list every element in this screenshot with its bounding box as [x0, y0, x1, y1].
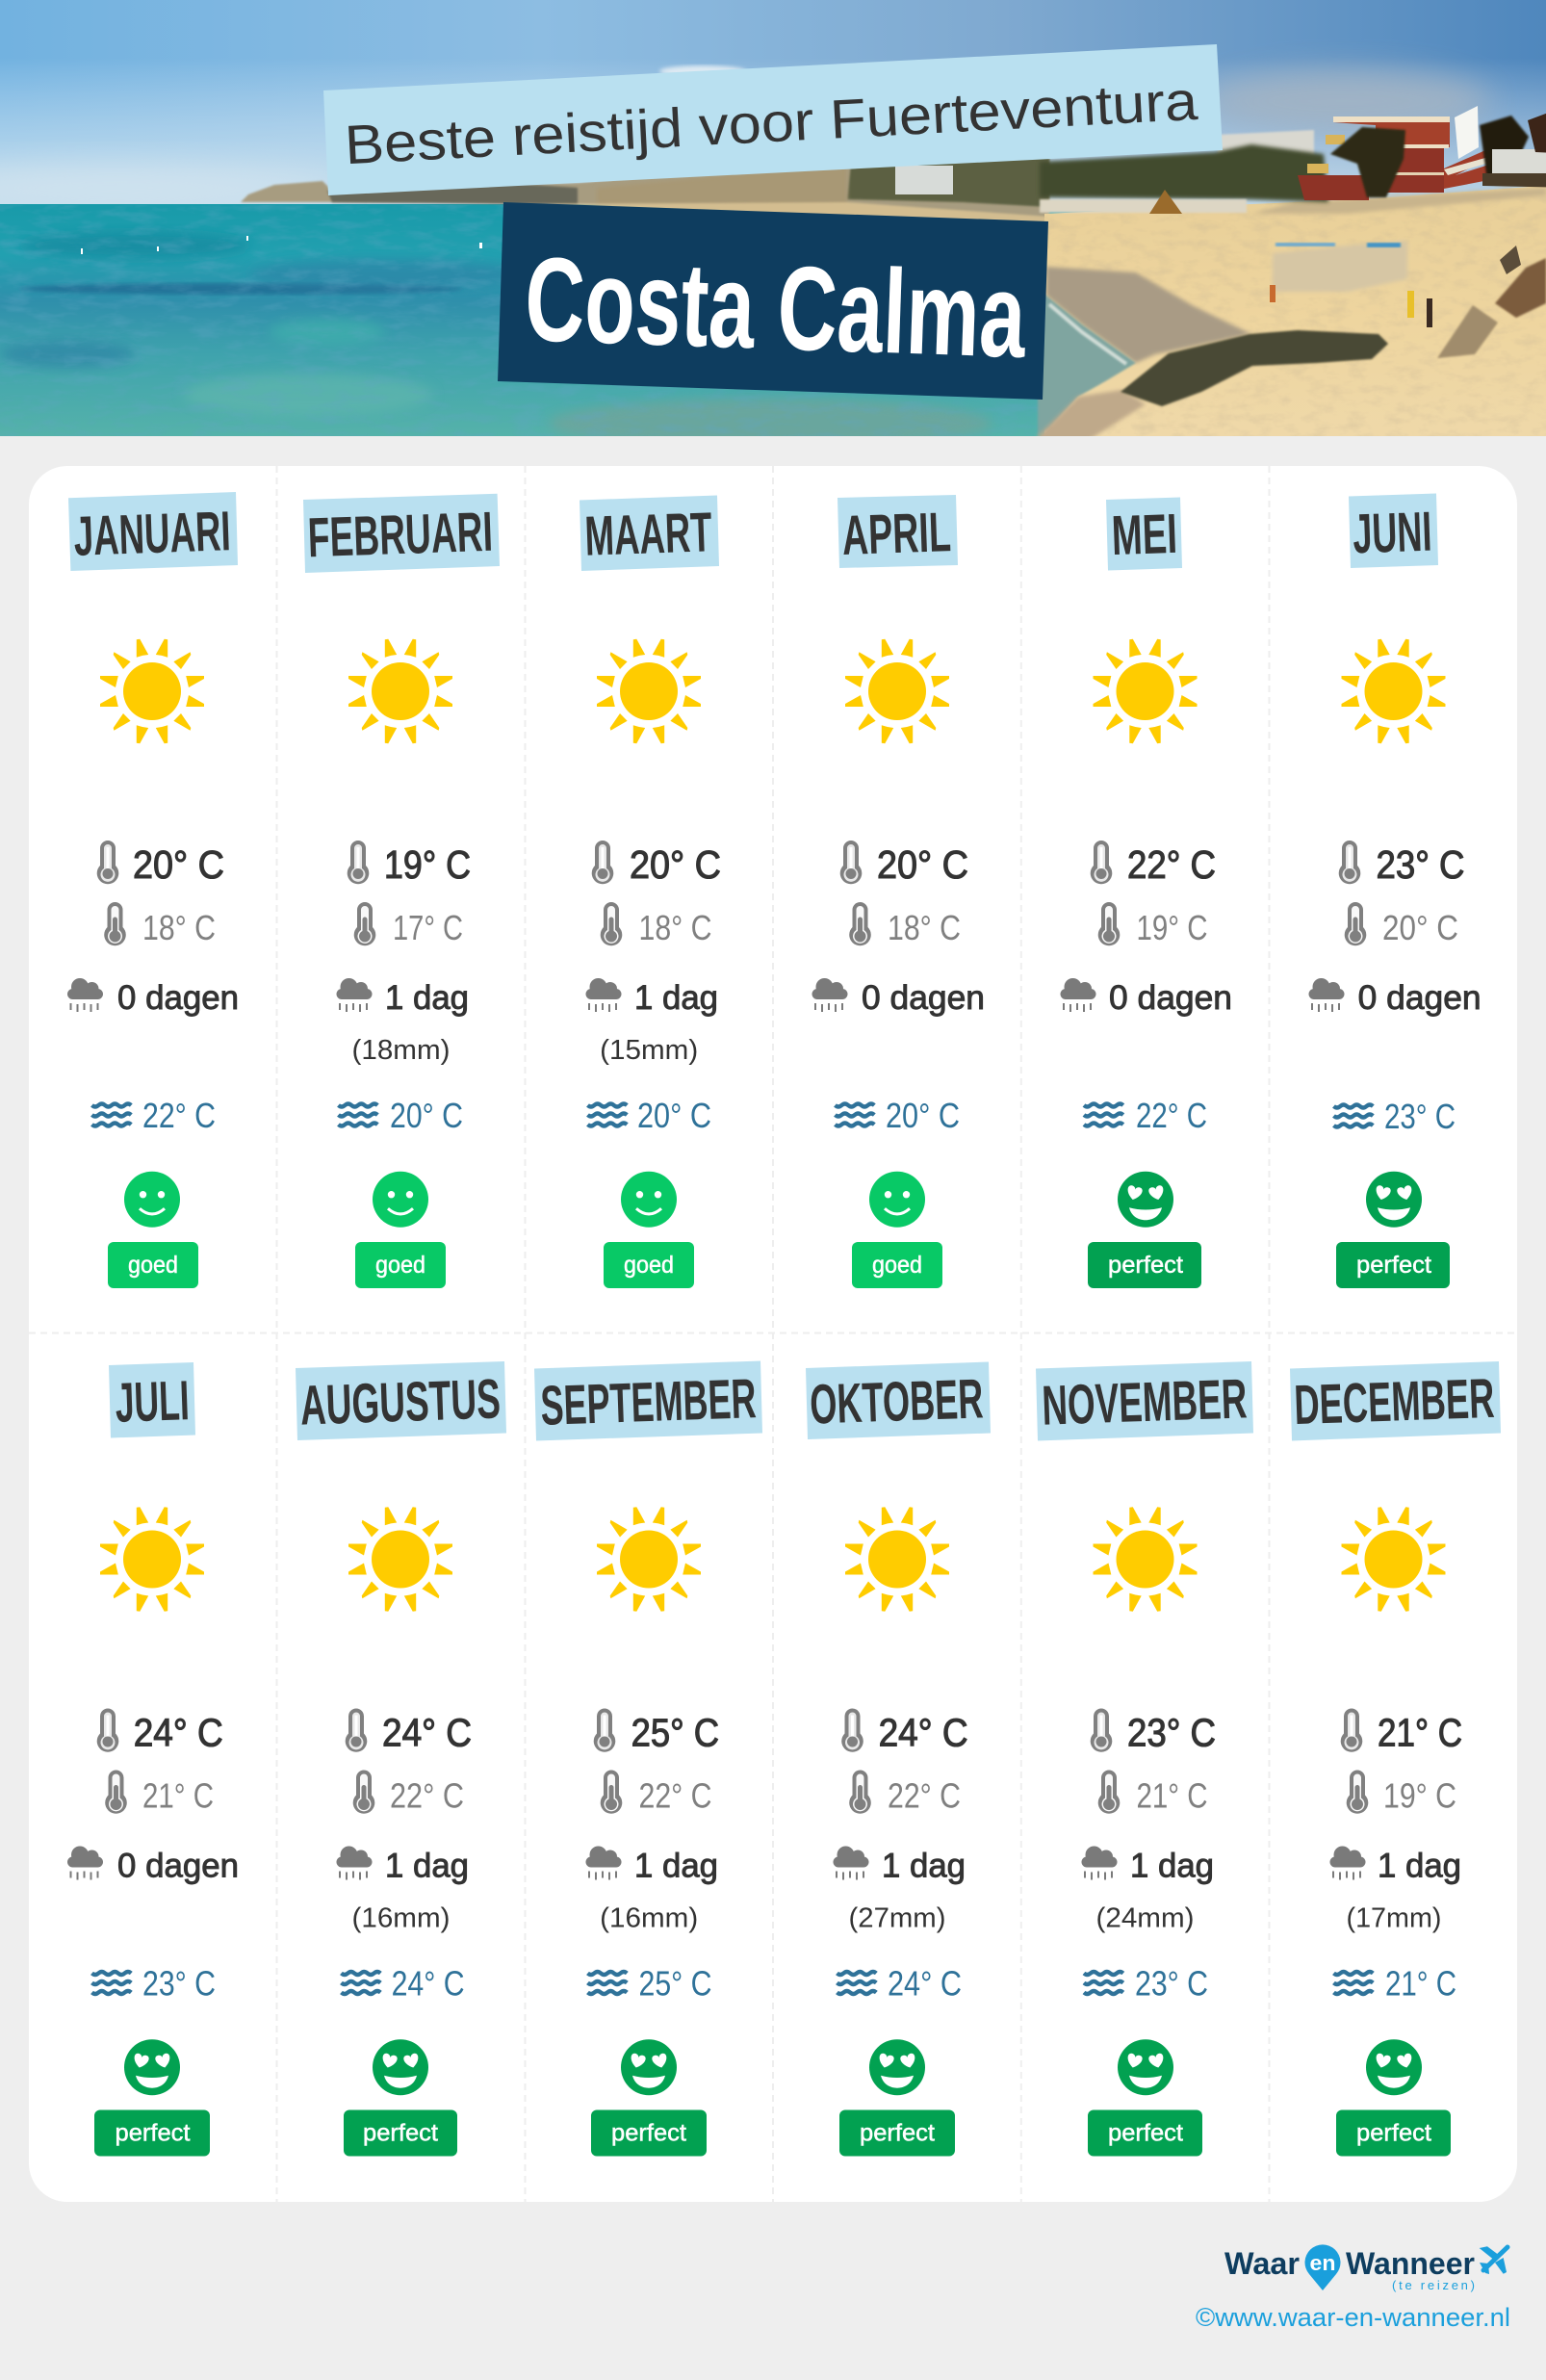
logo: Waar en Wanneer: [1224, 2244, 1507, 2292]
min temperature: [849, 1770, 961, 1816]
rain: [1309, 978, 1482, 1017]
min temperature: [104, 902, 216, 947]
min temperature: 18° C: [639, 908, 712, 947]
icon: sun: [845, 1507, 949, 1612]
month label: JULI: [115, 1369, 191, 1435]
rain: (16mm): [352, 1902, 451, 1933]
max temperature: [97, 1708, 223, 1754]
max temperature: [1091, 1708, 1216, 1754]
month label: SEPTEMBER: [539, 1367, 758, 1437]
month label: [1349, 493, 1438, 568]
min temperature: 18° C: [142, 908, 216, 947]
rating: perfect: [839, 2039, 955, 2157]
min temperature: 20° C: [1382, 908, 1458, 947]
icon: map pin: [1305, 2244, 1340, 2290]
title banner: Costa Calma: [523, 233, 1028, 383]
rain: 0 dagen: [1109, 979, 1232, 1017]
rating: goed: goed: [872, 1252, 922, 1279]
rating: perfect: [1336, 1172, 1450, 1288]
icon: sun: [1094, 639, 1198, 743]
rain: 1 dag: [634, 979, 718, 1017]
rain: [67, 1847, 239, 1885]
rating: goed: [604, 1172, 694, 1288]
rain: 1 dag: [1378, 1847, 1461, 1885]
rain: [1330, 1847, 1461, 1933]
rain: [834, 1847, 966, 1933]
rain: 0 dagen: [862, 979, 985, 1017]
max temperature: 23° C: [1377, 842, 1465, 887]
month: maart: [580, 495, 721, 1288]
panel: month calendar card: [29, 466, 1517, 2202]
icon: sun: [348, 1507, 452, 1612]
month: augustus: [296, 1361, 506, 2157]
rain: (27mm): [849, 1902, 945, 1933]
max temperature: 20° C: [630, 842, 721, 887]
month label: MEI: [1111, 503, 1178, 567]
rating: perfect: [1088, 1172, 1201, 1288]
rain: [1082, 1847, 1214, 1933]
month: juli: [67, 1362, 239, 2157]
icon: map pin: en: [1309, 2251, 1336, 2275]
month label: APRIL: [841, 501, 952, 567]
water temperature: [92, 1096, 216, 1135]
icon: sun: [348, 639, 452, 743]
min temperature: [1345, 902, 1458, 947]
rating: perfect: [1088, 2039, 1202, 2157]
rating: goed: [852, 1172, 942, 1288]
max temperature: [592, 841, 721, 887]
icon: sun: [1342, 1507, 1446, 1612]
subtitle banner: [323, 44, 1223, 195]
month label: JUNI: [1352, 501, 1432, 565]
water temperature: [1334, 1964, 1456, 2003]
rain: 0 dagen: [117, 1847, 239, 1885]
max temperature: 20° C: [133, 842, 224, 887]
icon: sun: [100, 639, 204, 743]
water temperature: [587, 1096, 711, 1135]
water temperature: 25° C: [639, 1964, 712, 2003]
logo: Waar en Wanneer: Waar: [1224, 2246, 1300, 2281]
max temperature: [1091, 841, 1216, 887]
min temperature: 19° C: [1383, 1775, 1456, 1816]
rain: [337, 1847, 469, 1933]
subtitle banner: Beste reistijd voor Fuerteventura: [343, 70, 1199, 176]
rating: perfect: perfect: [116, 2120, 191, 2147]
month label: [1036, 1361, 1253, 1440]
min temperature: [105, 1770, 214, 1816]
water temperature: 20° C: [390, 1096, 463, 1135]
header photo: beach of Costa Calma: [0, 0, 1546, 462]
month: december: [1290, 1361, 1501, 2157]
max temperature: [97, 841, 224, 887]
min temperature: [1098, 902, 1207, 947]
min temperature: [354, 902, 463, 947]
rain: 1 dag: [385, 979, 469, 1017]
max temperature: [1339, 841, 1465, 887]
rating: perfect: [344, 2039, 457, 2157]
rain: 1 dag: [1130, 1847, 1214, 1885]
water temperature: 20° C: [886, 1096, 960, 1135]
water temperature: 22° C: [1136, 1096, 1207, 1135]
rating: goed: goed: [128, 1252, 178, 1279]
min temperature: [1347, 1770, 1456, 1816]
max temperature: 22° C: [1127, 842, 1216, 887]
month label: [534, 1361, 762, 1440]
month: mei: [1061, 497, 1232, 1288]
icon: sun: [597, 639, 701, 743]
month label: NOVEMBER: [1041, 1367, 1248, 1437]
min temperature: 21° C: [142, 1775, 214, 1816]
month label: [837, 495, 958, 568]
month: september: [534, 1361, 762, 2157]
rating: goed: goed: [624, 1252, 674, 1279]
month label: [1106, 497, 1182, 570]
rain: [585, 978, 718, 1066]
min temperature: [601, 1770, 712, 1816]
rating: perfect: [591, 2039, 707, 2157]
water temperature: 23° C: [1384, 1097, 1456, 1136]
month label: FEBRUARI: [307, 501, 494, 569]
rain: 1 dag: [882, 1847, 966, 1885]
rating: perfect: perfect: [860, 2120, 935, 2147]
max temperature: [594, 1708, 719, 1754]
water temperature: [92, 1964, 216, 2003]
rain: (16mm): [600, 1902, 698, 1933]
max temperature: 24° C: [382, 1710, 472, 1754]
rain: [812, 978, 985, 1017]
rain: (18mm): [352, 1035, 451, 1066]
month: februari: [303, 494, 500, 1288]
rain: [585, 1847, 718, 1933]
max temperature: 23° C: [1127, 1710, 1216, 1754]
water temperature: [341, 1964, 465, 2003]
water temperature: 24° C: [888, 1964, 962, 2003]
min temperature: 17° C: [393, 908, 463, 947]
month: oktober: [806, 1361, 991, 2157]
icon: plane: [1480, 2246, 1507, 2274]
min temperature: [849, 902, 961, 947]
water temperature: 24° C: [392, 1964, 465, 2003]
rain: 0 dagen: [117, 979, 239, 1017]
month label: JANUARI: [73, 500, 232, 568]
min temperature: 21° C: [1136, 1775, 1207, 1816]
water temperature: [836, 1096, 960, 1135]
month label: [580, 495, 719, 571]
rating: goed: [108, 1172, 198, 1288]
min temperature: [601, 902, 712, 947]
min temperature: [1098, 1770, 1207, 1816]
month label: AUGUSTUS: [299, 1367, 502, 1437]
rain: [337, 978, 469, 1066]
rating: perfect: perfect: [1108, 2120, 1183, 2147]
icon: sun: [1342, 639, 1446, 743]
water temperature: [1084, 1964, 1208, 2003]
month label: [806, 1361, 991, 1439]
rain: [67, 978, 239, 1017]
icon: sun: [845, 639, 949, 743]
water temperature: [837, 1964, 962, 2003]
title banner: [498, 202, 1048, 400]
max temperature: 19° C: [384, 842, 471, 887]
min temperature: 18° C: [888, 908, 961, 947]
month label: [303, 494, 500, 573]
min temperature: 22° C: [390, 1775, 464, 1816]
month: april: [812, 495, 985, 1288]
min temperature: 22° C: [639, 1775, 712, 1816]
rating: perfect: [1336, 2039, 1451, 2157]
rain: 1 dag: [385, 1847, 469, 1885]
water temperature: 21° C: [1385, 1964, 1456, 2003]
copyright url: ©www.waar-en-wanneer.nl: [1196, 2303, 1510, 2332]
month label: MAART: [583, 501, 713, 568]
month: november: [1036, 1361, 1253, 2157]
rain: 0 dagen: [1358, 979, 1482, 1017]
water temperature: [339, 1096, 463, 1135]
max temperature: [346, 1708, 472, 1754]
rain: [1061, 978, 1232, 1017]
rating: perfect: perfect: [1108, 1252, 1183, 1279]
max temperature: [840, 841, 968, 887]
water temperature: [1084, 1096, 1207, 1135]
rain: (15mm): [600, 1035, 698, 1066]
rating: perfect: perfect: [1356, 2120, 1431, 2147]
max temperature: 25° C: [631, 1710, 719, 1754]
month: juni: [1309, 493, 1482, 1288]
rating: goed: [355, 1172, 446, 1288]
rating: perfect: perfect: [363, 2120, 438, 2147]
max temperature: 20° C: [877, 842, 968, 887]
rain: 1 dag: [634, 1847, 718, 1885]
rating: goed: goed: [375, 1252, 425, 1279]
max temperature: [348, 841, 471, 887]
rain: (24mm): [1095, 1902, 1194, 1933]
water temperature: [587, 1964, 712, 2003]
icon: sun: [1094, 1507, 1198, 1612]
max temperature: [1341, 1708, 1462, 1754]
logo: Waar en Wanneer: Wanneer: [1346, 2246, 1475, 2281]
min temperature: [353, 1770, 464, 1816]
water temperature: 23° C: [1135, 1964, 1208, 2003]
min temperature: 22° C: [888, 1775, 961, 1816]
max temperature: [841, 1708, 968, 1754]
rain: (17mm): [1346, 1902, 1442, 1933]
logo: Waar en Wanneer: (te reizen): [1392, 2278, 1475, 2292]
water temperature: 22° C: [142, 1096, 216, 1135]
rating: perfect: [94, 2039, 210, 2157]
month: januari: [67, 492, 239, 1288]
month label: OKTOBER: [809, 1367, 984, 1436]
max temperature: 24° C: [879, 1710, 968, 1754]
water temperature: 23° C: [142, 1964, 216, 2003]
max temperature: 24° C: [134, 1710, 223, 1754]
rating: perfect: perfect: [611, 2120, 686, 2147]
month label: [68, 492, 238, 571]
icon: sun: [597, 1507, 701, 1612]
min temperature: 19° C: [1136, 908, 1207, 947]
water temperature: [1334, 1097, 1456, 1136]
rating: perfect: perfect: [1356, 1252, 1431, 1279]
max temperature: 21° C: [1378, 1710, 1462, 1754]
month label: [296, 1361, 506, 1440]
water temperature: 20° C: [637, 1096, 711, 1135]
icon: sun: [100, 1507, 204, 1612]
month label: [109, 1362, 195, 1438]
